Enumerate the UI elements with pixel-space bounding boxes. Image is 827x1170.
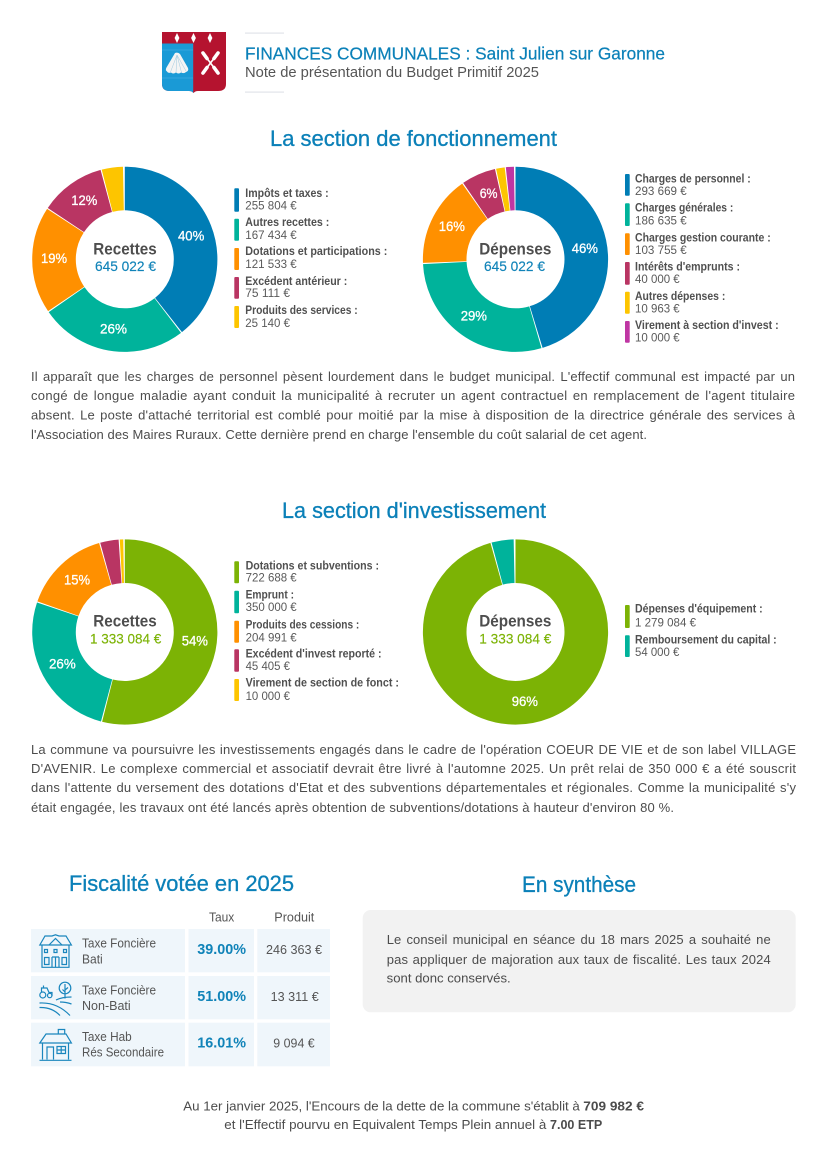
text block: commentaire fonctionnement: Il apparaît que les charges de personnel pèsent lourdement dans le budget municipal. L'effectif communal est impacté par un (31, 369, 795, 384)
legend: recettes de fonctionnement: Autres recettes : (245, 216, 329, 229)
subtitle: Note de présentation du Budget Primitif 2025 (245, 65, 539, 81)
donut chart: depenses d'investissement: Dépenses (479, 612, 551, 631)
legend: recettes de fonctionnement: 25 140 € (245, 316, 290, 330)
table: fiscalite votee: 9 094 € (273, 1037, 315, 1051)
legend: recettes d'investissement: Virement de section de fonct : (246, 677, 399, 690)
donut chart: depenses de fonctionnement: 16% (439, 218, 465, 234)
title: FINANCES COMMUNALES : Saint Julien sur Garonne (245, 44, 665, 64)
icon: maison bati (40, 935, 71, 967)
table: fiscalite votee: Bati (82, 952, 103, 966)
legend: recettes d'investissement: 45 405 € (246, 659, 290, 673)
legend: depenses de fonctionnement: 10 963 € (635, 301, 680, 315)
panel: en synthese: sont donc conservés. (387, 971, 511, 986)
donut chart: recettes de fonctionnement: Recettes (93, 239, 157, 258)
legend: recettes de fonctionnement: 75 111 € (245, 286, 290, 300)
legend: depenses de fonctionnement: Charges de personnel : (635, 173, 751, 186)
text block: commentaire investissement: La commune va poursuivre les investissements engagés dans le cadre de l'opération COEUR DE VIE et de son label VILLAGE (31, 742, 796, 757)
icon: champ et tracteur (40, 982, 72, 1016)
text block: commentaire fonctionnement (31, 369, 796, 442)
legend: recettes d'investissement: 350 000 € (246, 600, 297, 614)
table: fiscalite votee: Non-Bati (82, 999, 131, 1013)
icon: maison residence secondaire (40, 1030, 72, 1060)
header (162, 32, 665, 93)
footer: dette et effectif (183, 1099, 644, 1132)
table: fiscalite votee: 246 363 € (266, 943, 322, 957)
donut chart: depenses d'investissement (445, 561, 586, 709)
legend: recettes d'investissement (234, 559, 399, 703)
panel: en synthese (363, 910, 796, 1012)
donut chart: recettes d'investissement: Recettes (93, 612, 157, 631)
legend: recettes de fonctionnement: Produits des services : (245, 304, 358, 317)
donut chart: depenses de fonctionnement: 6% (480, 185, 498, 201)
donut chart: recettes de fonctionnement (41, 188, 204, 336)
table: fiscalite votee: Rés Secondaire (82, 1046, 164, 1060)
legend: depenses de fonctionnement: 40 000 € (635, 272, 680, 286)
legend: recettes de fonctionnement: Impôts et taxes : (245, 187, 329, 200)
footer: dette et effectif: 7.00 ETP (550, 1117, 603, 1132)
legend: depenses de fonctionnement: Intérêts d'emprunts : (635, 261, 740, 274)
legend: depenses d'investissement (625, 603, 777, 659)
legend: depenses d'investissement: Dépenses d'équipement : (635, 603, 763, 616)
legend: recettes de fonctionnement: 167 434 € (245, 228, 297, 242)
donut chart: recettes de fonctionnement: 645 022 € (95, 259, 156, 274)
table: fiscalite votee: Taxe Hab (82, 1030, 132, 1044)
panel: en synthese: Le conseil municipal en séance du 18 mars 2025 a souhaité ne (387, 932, 771, 947)
donut chart: depenses de fonctionnement: 29% (461, 308, 487, 324)
table: fiscalite votee (31, 911, 330, 1066)
legend: recettes d'investissement: Produits des cessions : (246, 619, 359, 632)
text block: commentaire fonctionnement: congé de longue maladie ayant conduit la municipalité à recruter un agent contractuel en remplacement de l'agent titulaire (31, 388, 795, 403)
donut chart: recettes d'investissement: 54% (182, 633, 208, 649)
table: fiscalite votee: Taux (209, 911, 235, 925)
icon: municipal coat of arms (162, 32, 226, 93)
legend: recettes d'investissement: 204 991 € (246, 631, 297, 645)
legend: recettes de fonctionnement: Excédent antérieur : (245, 275, 347, 288)
text block: commentaire fonctionnement: absent. Le poste d'attaché territorial est comblé pour moitié par la mise à disposition de la directrice générale des services à (31, 408, 796, 422)
donut chart: recettes de fonctionnement: 19% (41, 250, 67, 266)
legend: depenses de fonctionnement: 186 635 € (635, 213, 687, 227)
donut chart: recettes de fonctionnement: 26% (100, 320, 127, 336)
legend: depenses d'investissement: Remboursement du capital : (635, 633, 777, 646)
donut chart: depenses de fonctionnement: Dépenses (479, 239, 551, 258)
footer: dette et effectif: 709 982 € (583, 1099, 644, 1114)
table: fiscalite votee: Produit (274, 911, 315, 925)
legend: depenses d'investissement: 1 279 084 € (635, 616, 696, 630)
donut chart: depenses d'investissement: 96% (512, 693, 538, 709)
heading: section de fonctionnement: La section de fonctionnement (270, 126, 557, 151)
text block: commentaire investissement (31, 742, 796, 815)
table: fiscalite votee: Taxe Foncière (82, 937, 156, 951)
table: fiscalite votee: 39.00% (197, 942, 246, 958)
legend: depenses de fonctionnement: Charges générales : (635, 202, 733, 215)
legend: recettes de fonctionnement: 255 804 € (245, 198, 297, 212)
legend: recettes d'investissement: Dotations et subventions : (246, 559, 379, 572)
donut chart: depenses de fonctionnement (439, 185, 598, 330)
heading: fiscalite: Fiscalité votée en 2025 (69, 871, 294, 896)
legend: recettes d'investissement: Emprunt : (246, 588, 294, 601)
legend: depenses de fonctionnement: 103 755 € (635, 243, 687, 257)
panel: en synthese: pas appliquer de majoration aux taux de fiscalité. Les taux 2024 (387, 952, 771, 967)
text block: commentaire fonctionnement: l'Association des Maires Ruraux. Cette dernière prend en charge l'ensemble du coût salarial de cet agent. (31, 427, 647, 442)
donut chart: depenses de fonctionnement: 46% (572, 240, 598, 256)
legend: depenses d'investissement: 54 000 € (635, 645, 680, 659)
legend: depenses de fonctionnement (625, 173, 779, 345)
donut chart: recettes d'investissement: 1 333 084 € (90, 631, 162, 646)
heading: section d'investissement: La section d'investissement (282, 498, 546, 523)
table: fiscalite votee: 51.00% (197, 989, 246, 1005)
footer: dette et effectif: et l'Effectif pourvu en Equivalent Temps Plein annuel à (224, 1117, 547, 1132)
text block: commentaire investissement: dans l'attente du versement des dotations d'Etat et des subventions départementales et régionales. Comme la municipalité s'y (31, 780, 796, 795)
legend: depenses de fonctionnement: Charges gestion courante : (635, 231, 771, 244)
table: fiscalite votee: 13 311 € (271, 990, 319, 1004)
legend: depenses de fonctionnement: Virement à section d'invest : (635, 319, 779, 332)
donut chart: recettes d'investissement (49, 561, 208, 703)
legend: recettes d'investissement: 10 000 € (246, 689, 290, 703)
legend: recettes de fonctionnement (234, 187, 387, 330)
text block: commentaire investissement: était engagée, les travaux ont été lancés après obtention de subventions/dotations à hauteur d'environ 80 %. (31, 800, 674, 815)
legend: recettes de fonctionnement: 121 533 € (245, 257, 297, 271)
legend: recettes d'investissement: Excédent d'invest reporté : (246, 648, 382, 661)
legend: depenses de fonctionnement: Autres dépenses : (635, 290, 725, 303)
text block: commentaire investissement: D'AVENIR. Le complexe commercial et associatif devrait être livré à l'automne 2025. Un prêt relai de 350 000 € a été souscrit (31, 761, 796, 776)
donut chart: depenses d'investissement: 1 333 084 € (479, 631, 552, 646)
donut chart: recettes de fonctionnement: 40% (178, 227, 204, 243)
donut chart: recettes d'investissement: 15% (64, 571, 90, 587)
legend: recettes de fonctionnement: Dotations et participations : (245, 245, 387, 258)
donut chart: recettes de fonctionnement: 12% (71, 192, 97, 208)
table: fiscalite votee: Taxe Foncière (82, 983, 156, 997)
legend: recettes d'investissement: 722 688 € (246, 571, 297, 585)
donut chart: recettes d'investissement: 26% (49, 656, 76, 672)
table: fiscalite votee: 16.01% (197, 1036, 246, 1052)
legend: depenses de fonctionnement: 293 669 € (635, 184, 687, 198)
donut chart: depenses de fonctionnement: 645 022 € (484, 259, 545, 274)
legend: depenses de fonctionnement: 10 000 € (635, 331, 680, 345)
footer: dette et effectif: Au 1er janvier 2025, l'Encours de la dette de la commune s'établit à (183, 1099, 581, 1114)
heading: en synthese: En synthèse (522, 872, 636, 897)
